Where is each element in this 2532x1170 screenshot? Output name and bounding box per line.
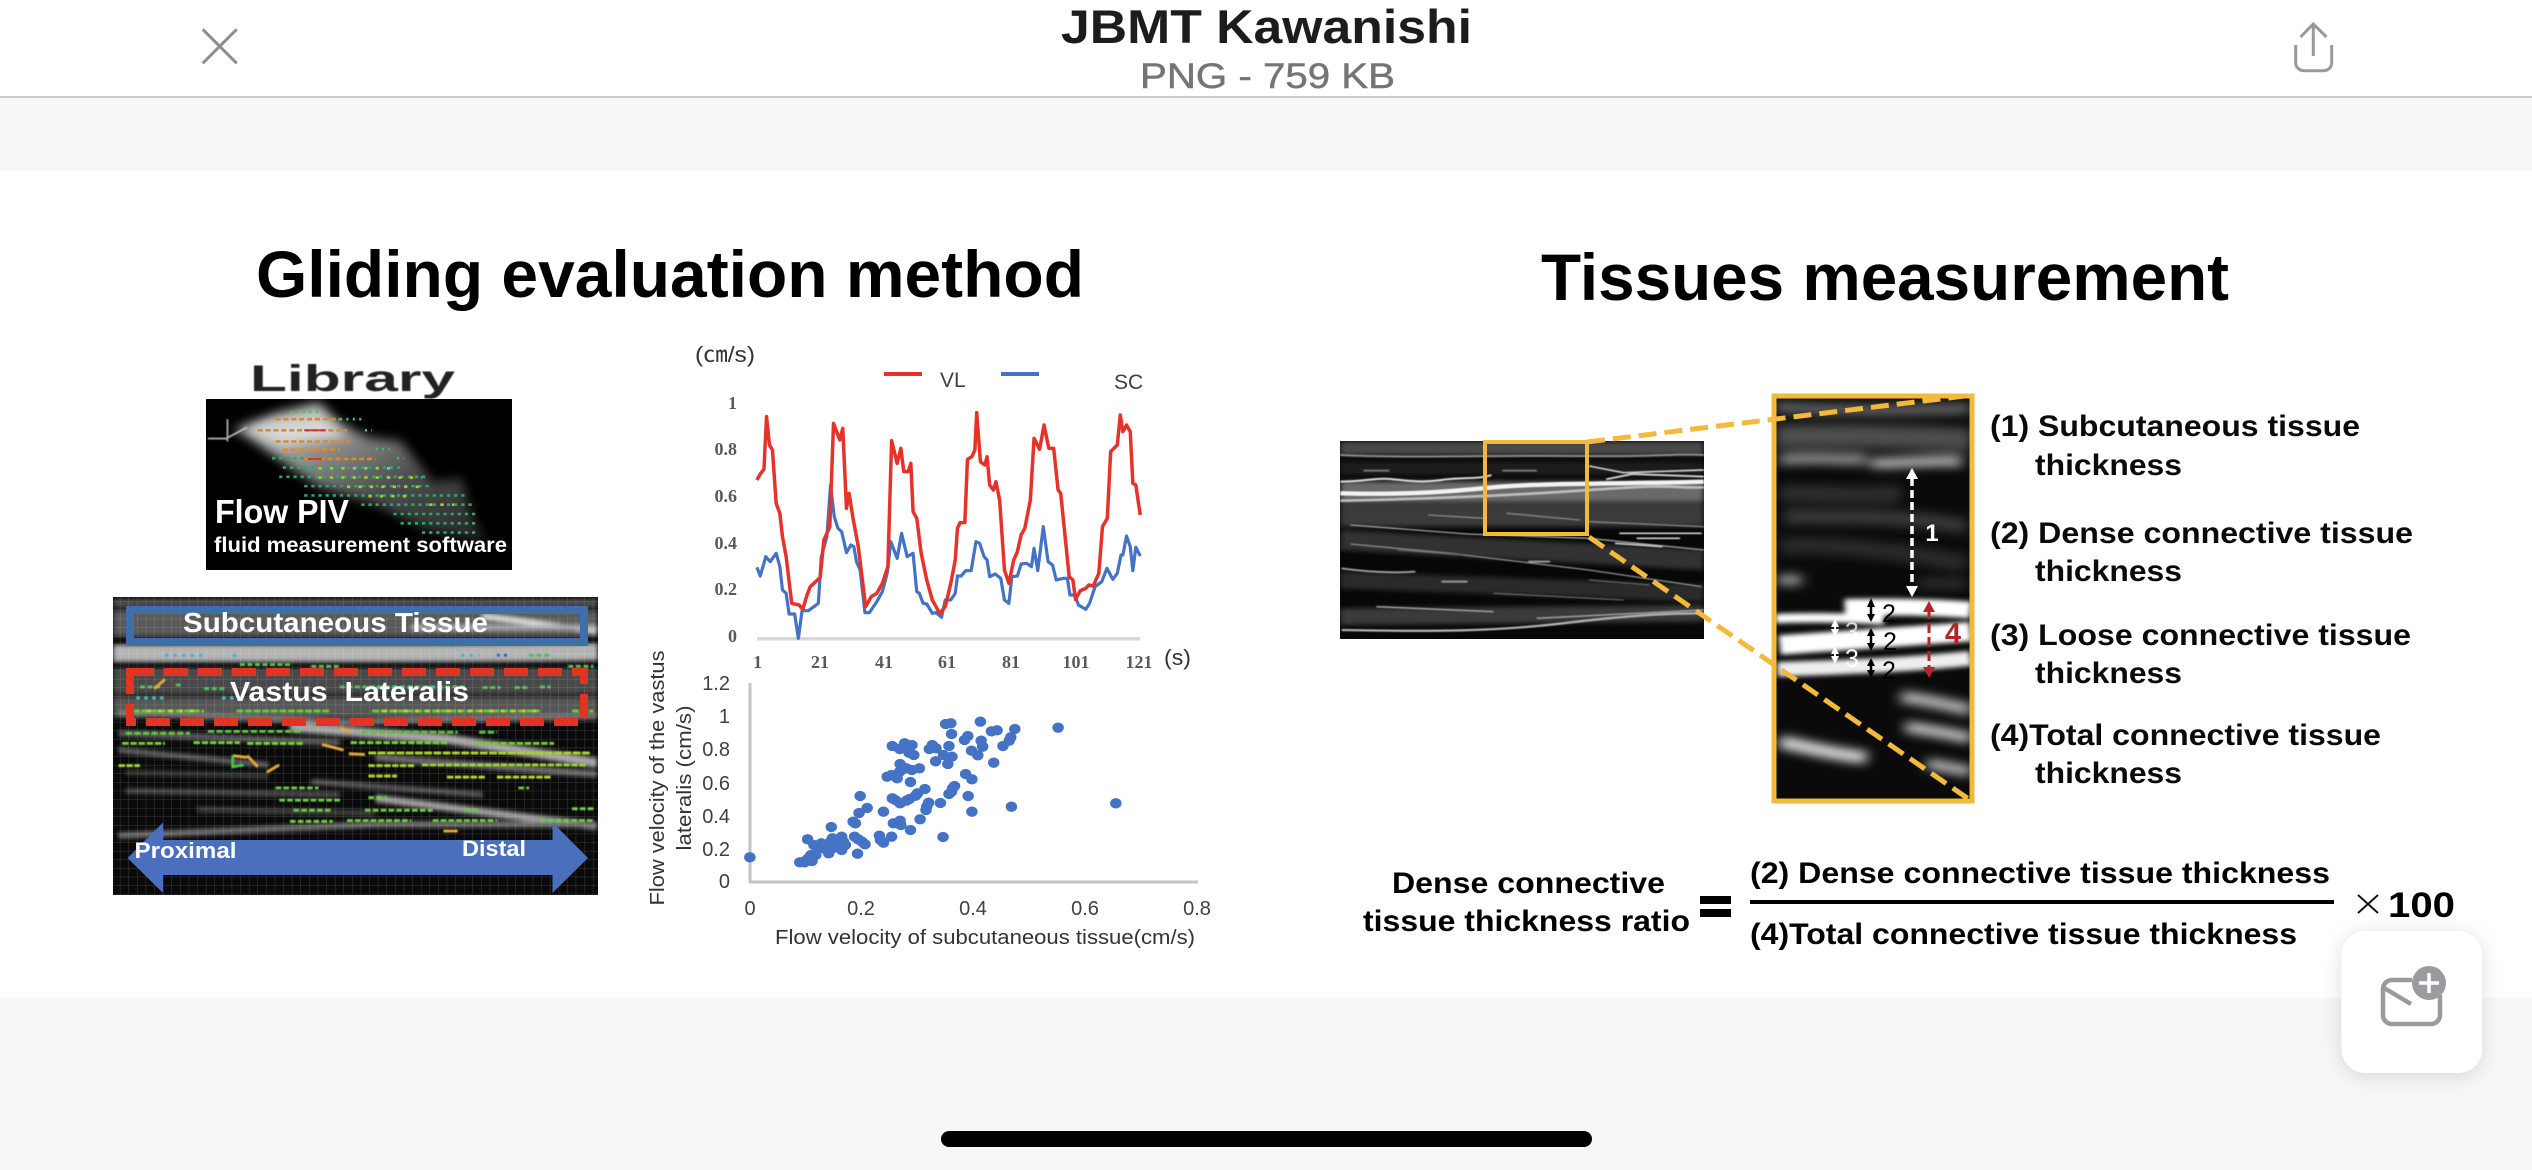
measurements 3: 3 [1845,618,1859,646]
legend: VL [940,369,966,392]
y ticks: 0.6 [702,773,730,795]
heading: tissues measurement: Tissues measurement [1541,240,2229,314]
item 4: thickness [2035,757,2182,790]
y ticks: 1.2 [702,673,730,695]
tissue fibres [1340,455,1704,631]
x ticks: 0.8 [1183,898,1211,920]
y axis title: Flow velocity of the vastus [647,651,669,905]
x axis ticks: 41 [875,652,893,672]
y axis title: lateralis (cm/s) [674,706,696,850]
arrow: proximal to distal [128,822,588,893]
SC series [757,485,1140,638]
y axis ticks: 0.4 [714,533,737,553]
definitions list [1990,410,2413,790]
denominator: (4)Total connective tissue thickness [1750,918,2297,951]
ratio formula [1363,857,2455,951]
y axis ticks: 0 [728,626,737,646]
y axis ticks: 1 [728,393,737,413]
y ticks: 0.4 [702,806,730,828]
y axis ticks [714,393,737,646]
ultrasound tissue bands [113,603,598,836]
measurements 2: 2 [1883,628,1897,656]
x axis ticks: 21 [811,652,829,672]
label: Subcutaneous Tissue: Subcutaneous Tissue [183,607,488,638]
unit label: (㎝/s) [695,342,755,367]
x axis line [757,637,1140,640]
heading: gliding evaluation method: Gliding evaluation method [256,237,1084,311]
axes [750,683,1198,882]
equals sign [1700,896,1731,917]
item 3: (3) Loose connective tissue [1990,619,2411,652]
panel: ultrasound flow image [113,597,598,895]
measurements 3: 3 [1845,645,1859,673]
x ticks: 0.6 [1071,898,1099,920]
flow vectors [119,644,593,831]
white slide panel [0,171,2532,998]
panel: magnified ultrasound with measurement arrows [1774,396,1972,801]
item 4: (4)Total connective tissue [1990,719,2381,752]
y axis ticks: 0.2 [714,579,737,599]
blue box: subcutaneous tissue region [130,610,584,642]
item 1: (1) Subcutaneous tissue [1990,410,2360,443]
item 2 [1990,517,2413,588]
formula left term: Dense connective [1392,867,1665,900]
x axis ticks: 61 [938,652,956,672]
yellow frame [1774,396,1972,801]
label: fluid measurement software: fluid measurement software [214,534,507,557]
multiplier value: 100 [2388,886,2455,925]
document name: JBMT Kawanishi [1061,0,1472,53]
icon: new mail [2383,966,2446,1024]
y ticks: 1 [719,706,730,728]
item 1: thickness [2035,449,2182,482]
x axis ticks: 1 [753,652,762,672]
line chart: flow velocity over time [695,342,1191,672]
label: Distal: Distal [462,836,526,861]
x axis ticks: 81 [1002,652,1020,672]
label: Proximal: Proximal [134,838,236,863]
x axis title: Flow velocity of subcutaneous tissue(cm/s) [775,927,1195,949]
icon: share [2296,24,2332,71]
item 2: (2) Dense connective tissue [1990,517,2413,550]
legend [884,369,1143,394]
measurement 4 [1923,601,1961,678]
y axis ticks: 0.6 [714,486,737,506]
measurements 2: 2 [1882,657,1896,685]
label: Flow PIV: Flow PIV [215,493,349,530]
legend: SC [1114,371,1143,394]
item 1 [1990,410,2360,482]
multiply sign [2358,895,2378,913]
measurements 3 [1831,618,1859,673]
x axis ticks: 121 [1126,652,1152,672]
data points [744,716,1122,867]
y ticks: 0.2 [702,839,730,861]
y ticks: 0.8 [702,739,730,761]
x ticks: 0.4 [959,898,987,920]
Library logo: Library [250,358,456,399]
formula left term: tissue thickness ratio [1363,905,1690,938]
dashed zoom lines [1587,395,1973,800]
x unit: (s) [1164,645,1191,670]
x ticks: 0.2 [847,898,875,920]
y axis title [647,650,696,906]
measurement 4: 4 [1945,618,1961,650]
measurements 2: 2 [1882,600,1896,628]
top navigation bar [0,0,2532,98]
x axis ticks: 101 [1062,652,1090,672]
measurements 2 [1867,598,1897,685]
formula left term [1363,867,1690,938]
fraction bar [1750,900,2334,904]
measurement 1 [1906,468,1939,597]
file info: PNG - 759 KB [1140,57,1395,96]
home indicator [941,1131,1592,1147]
icon: close [203,29,237,63]
item 2: thickness [2035,555,2182,588]
scatter plot: VL versus SC flow velocity [647,650,1211,949]
panel: Flow PIV software screenshot [206,358,512,570]
x ticks: 0 [744,898,756,920]
y ticks: 0 [719,871,730,893]
floating mail button [2342,931,2482,1073]
yellow selection box [1485,442,1587,534]
measurement 1: 1 [1925,520,1939,547]
VL series [757,413,1140,613]
red dashed box: vastus lateralis region [130,672,584,722]
item 3 [1990,619,2411,690]
x ticks [744,898,1211,920]
label: Vastus Lateralis: Vastus Lateralis [230,676,469,707]
numerator: (2) Dense connective tissue thickness [1750,857,2330,890]
soft tissue background [1340,448,1704,617]
panel: full ultrasound image [1340,441,1704,639]
item 3: thickness [2035,657,2182,690]
y axis ticks: 0.8 [714,439,737,459]
x axis ticks [753,652,1152,672]
item 4 [1990,719,2381,790]
y ticks [702,673,730,893]
